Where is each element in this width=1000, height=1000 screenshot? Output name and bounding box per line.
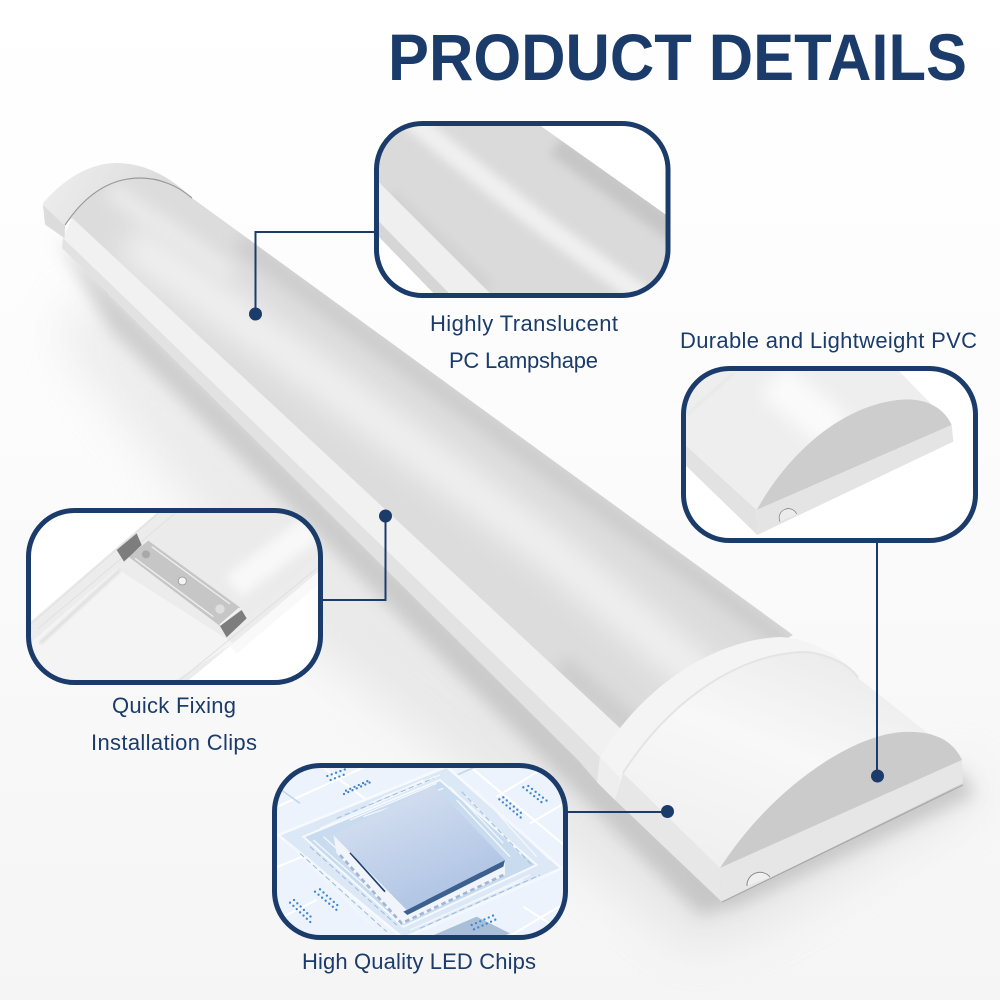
LED batten lamp xyxy=(43,163,985,950)
near end gray face xyxy=(720,732,962,868)
lampshade edge shade xyxy=(557,145,677,232)
flange top xyxy=(63,218,622,757)
panel: LED chip inset xyxy=(270,760,570,947)
PVC gray face xyxy=(757,399,952,510)
LED chip side xyxy=(333,835,505,925)
PVC side flange xyxy=(686,446,758,535)
label: Quick Fixing Installation Clips: Quick Fixing xyxy=(112,693,236,718)
upper edge shade xyxy=(240,242,790,645)
connector: clips to inset xyxy=(322,510,392,600)
lower end shade xyxy=(559,663,632,728)
near end dome xyxy=(623,652,962,868)
diffuser body xyxy=(65,178,793,735)
flange side xyxy=(62,238,600,782)
near end side flange xyxy=(615,773,722,902)
label: Highly Translucent PC Lampshape: Highly Translucent xyxy=(430,311,618,336)
label: Durable and Lightweight PVC: Durable and Lightweight PVC xyxy=(680,328,977,353)
lamp shadow xyxy=(55,235,985,950)
near end front strip xyxy=(720,760,963,902)
lamp body close-up xyxy=(31,513,318,680)
PVC dome xyxy=(686,371,932,510)
label: Quick Fixing Installation Clips xyxy=(91,693,257,755)
circuit tile grid xyxy=(277,768,563,935)
LED chip top xyxy=(333,785,505,910)
label: High Quality LED Chips: High Quality LED Chips xyxy=(302,949,536,974)
label: Highly Translucent PC Lampshape: PC Lampshape xyxy=(449,348,598,373)
circuit traces xyxy=(285,775,550,933)
title: PRODUCT DETAILS xyxy=(388,20,967,94)
lamp body edge strip xyxy=(270,573,317,613)
panel: installation clips inset xyxy=(27,510,330,690)
panel: lampshade inset xyxy=(370,115,677,302)
PVC front strip xyxy=(757,425,953,535)
label: Quick Fixing Installation Clips: Installation Clips xyxy=(91,730,257,755)
near end band xyxy=(597,637,860,800)
connector: LED chips to inset xyxy=(566,805,674,818)
connector: PVC to inset xyxy=(871,541,884,782)
label: Highly Translucent PC Lampshape xyxy=(430,311,618,373)
highlight stripe xyxy=(130,240,710,685)
lampshade highlight xyxy=(410,118,650,302)
far end cap xyxy=(43,163,192,238)
metal clip plate xyxy=(117,533,247,637)
lampshade flange xyxy=(379,182,489,293)
lampshade surface xyxy=(379,126,666,293)
panel: PVC end inset xyxy=(680,360,976,540)
connector: lampshade to inset xyxy=(249,232,376,320)
contact dot rows xyxy=(290,769,547,929)
circuit board xyxy=(278,767,562,938)
